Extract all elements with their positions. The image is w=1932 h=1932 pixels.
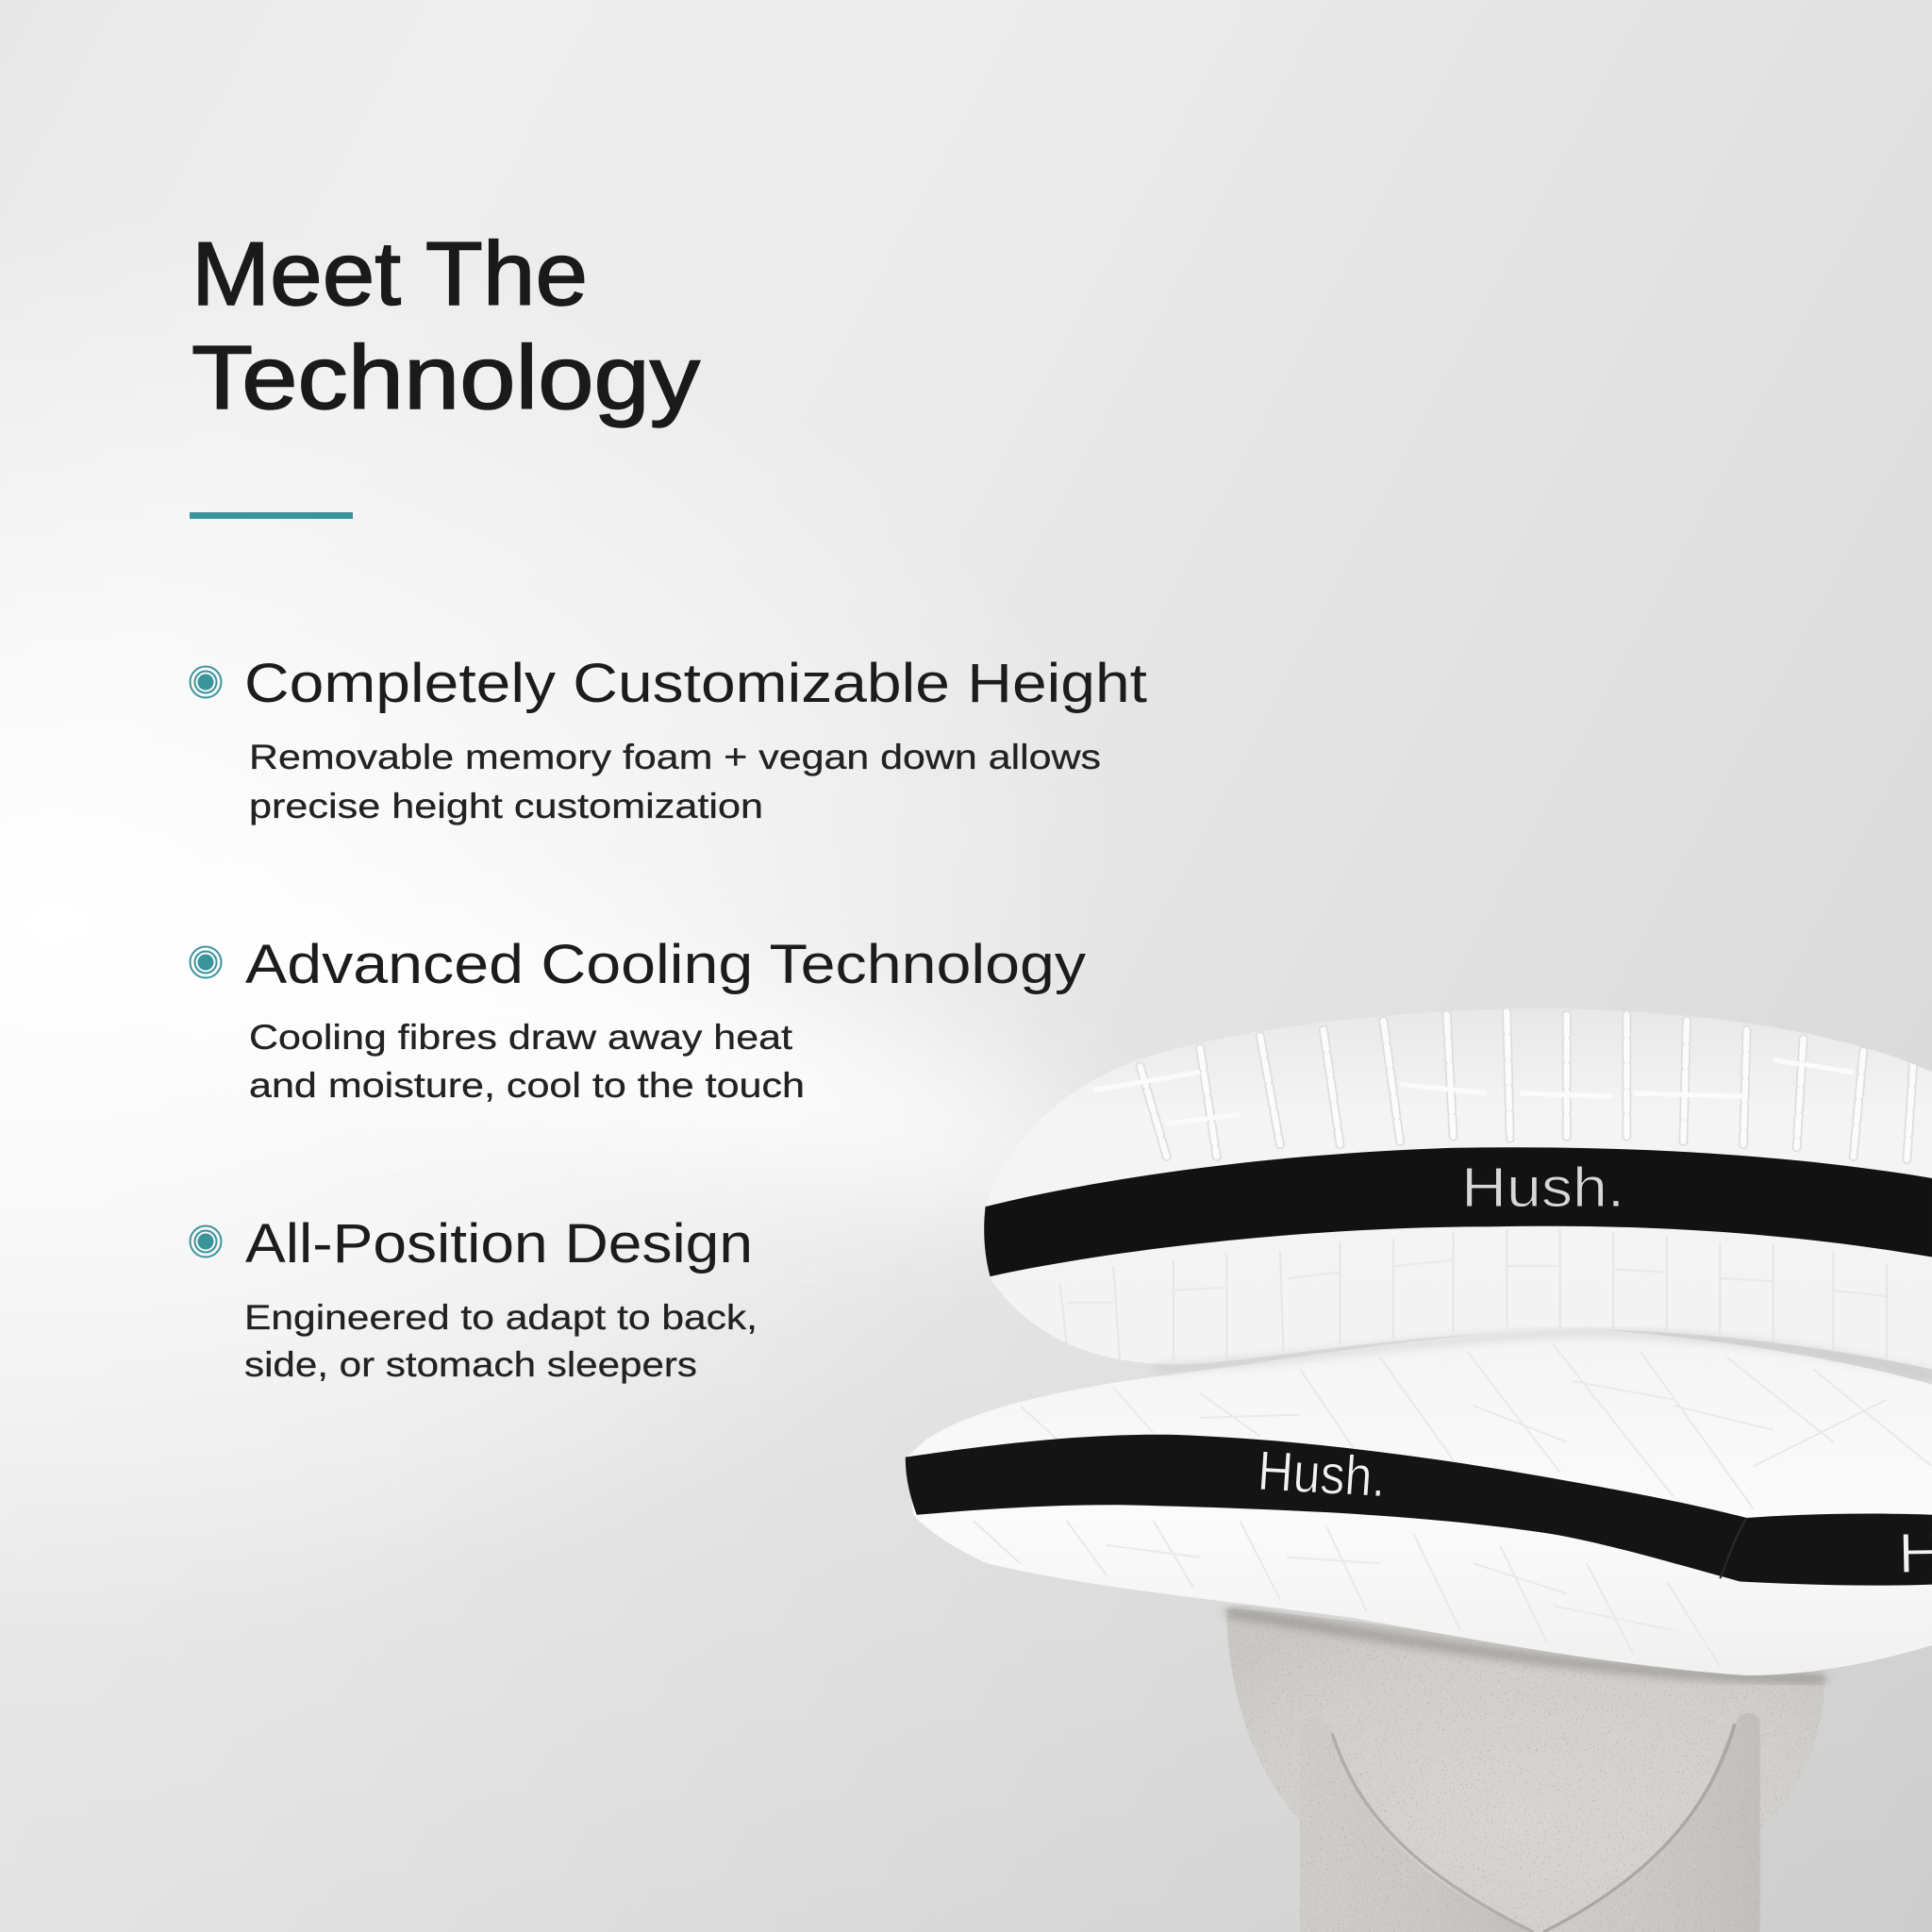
lower pillow	[906, 1329, 1932, 1675]
description: customizable height: Removable memory foam + vegan down allows	[249, 738, 1101, 776]
icon: target bullet	[191, 666, 221, 698]
contact shadow	[1226, 1612, 1825, 1678]
icon: target bullet	[191, 1226, 221, 1257]
emboss pattern	[974, 1345, 1932, 1666]
heading: all-position: All-Position Design	[245, 1213, 753, 1274]
brand label: Hush.	[1256, 1441, 1388, 1509]
brand label: Hush.	[1461, 1158, 1624, 1219]
upper pillow	[984, 1008, 1932, 1375]
description: customizable height: precise height customization	[249, 787, 763, 825]
title	[192, 224, 700, 428]
description: cooling	[249, 1018, 805, 1105]
description: all-position: side, or stomach sleepers	[244, 1345, 697, 1384]
description: all-position: Engineered to adapt to back,	[244, 1298, 758, 1337]
icon: target bullet	[191, 947, 221, 977]
light beam	[32, 823, 1100, 1253]
accent rule	[190, 512, 353, 519]
title: Meet The	[192, 224, 588, 325]
feature: customizable height	[191, 653, 1147, 825]
fabric band	[906, 1435, 1932, 1586]
fabric band	[984, 1147, 1932, 1276]
pillow underside shadow	[1154, 1332, 1932, 1375]
feature: all-position	[191, 1213, 758, 1384]
product photo: stool and pillows	[906, 1008, 1932, 1932]
description: cooling: and moisture, cool to the touch	[249, 1066, 805, 1105]
feature: cooling	[191, 934, 1086, 1105]
quilted columns	[1060, 1011, 1913, 1363]
description: customizable height	[249, 738, 1101, 825]
heading: cooling: Advanced Cooling Technology	[245, 934, 1086, 995]
concrete stool	[1226, 1608, 1825, 1932]
heading: customizable height: Completely Customizable Height	[244, 653, 1147, 714]
description: cooling: Cooling fibres draw away heat	[249, 1018, 793, 1057]
description: all-position	[244, 1298, 758, 1384]
title: Technology	[192, 327, 700, 428]
